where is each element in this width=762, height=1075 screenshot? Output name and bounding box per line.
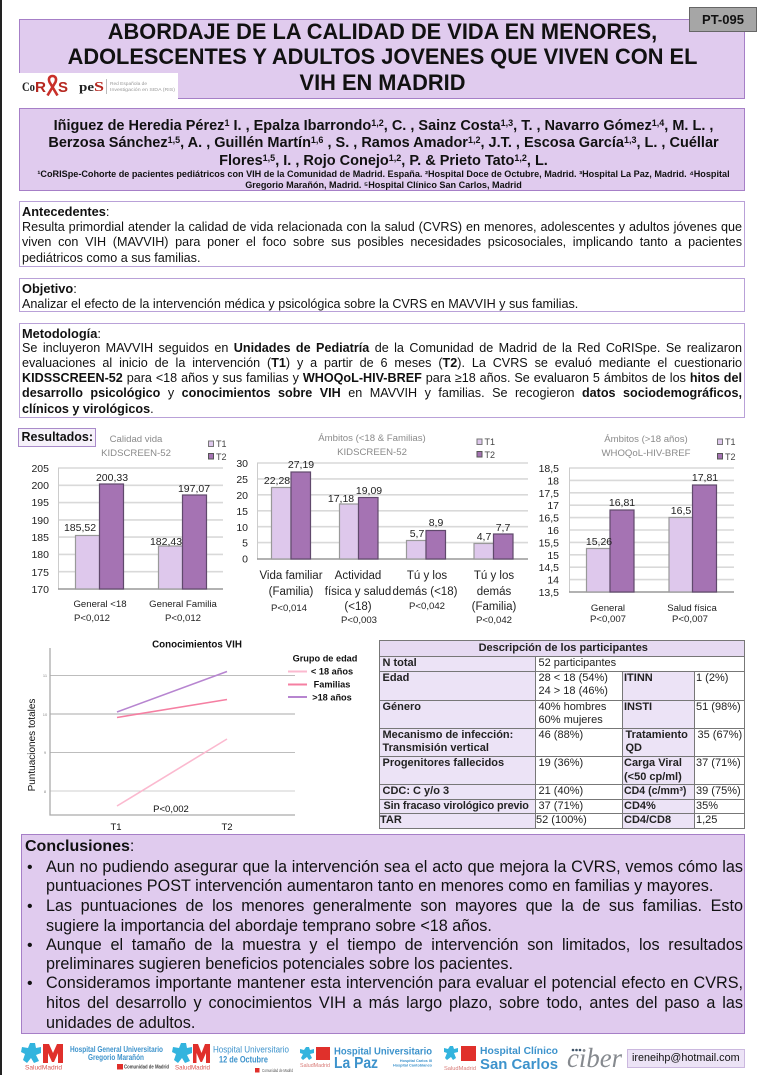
text: conclusiones bullets: sugiere la importancia del abordaje temprano sobre <18 años. [46, 917, 492, 935]
logo: ciber: ciber [567, 1043, 622, 1073]
chart: conocimientos VIH: 10 [43, 712, 48, 717]
table: descripcion de los participantes: 35 (67%) [698, 729, 742, 741]
logo: Hospital 12 de Octubre: SaludMadrid [175, 1064, 210, 1072]
text: conclusiones bullets: Las puntuaciones de los menores generalmente son mayores que la de sus familias. Esto [46, 897, 743, 915]
text: conclusiones bullets: • [27, 898, 33, 915]
table: descripcion de los participantes: 28 < 18 (54%) [538, 672, 608, 684]
chart: calidad de vida KIDSCREEN-52: 197,07 [178, 483, 210, 495]
logo: Hospital La Paz: Hospital Carlos III [400, 1059, 432, 1063]
chart: conocimientos VIH: Conocimientos VIH [152, 640, 242, 650]
chart: ambitos mayores de 18 WHOQoL: T1 [725, 437, 736, 447]
panel: authors [19, 108, 745, 191]
table: descripcion de los participantes: (<50 cp/ml) [624, 771, 682, 783]
chart: ambitos mayores de 18 WHOQoL: 14,5 [539, 562, 559, 574]
logo: CoRISpeS: pe [79, 79, 94, 94]
text: conclusiones bullets: Aunque el tamaño de la muestra y el tiempo de intervención son limitados, los resultados [46, 936, 743, 954]
logo: Hospital Gregorio Marañón: Gregorio Marañón [88, 1052, 144, 1062]
chart: ambitos menores de 18 y familias: demás (<18) [393, 586, 458, 598]
text: authors and affiliations: Flores1,5, I. , Rojo Conejo1,2, P. & Prieto Tato1,2, L. [219, 153, 548, 169]
logo: Hospital La Paz [300, 1046, 433, 1072]
chart: ambitos mayores de 18 WHOQoL: P<0,007 [672, 614, 708, 625]
logo: Hospital Gregorio Marañón: Hospital General Universitario [70, 1044, 163, 1054]
chart: ambitos menores de 18 y familias: 15 [236, 506, 248, 518]
chart: ambitos mayores de 18 WHOQoL [539, 434, 736, 625]
table: descripcion de los participantes: CD4/CD8 [624, 814, 671, 826]
heading: conclusiones: Conclusiones: [25, 838, 134, 855]
chart: conocimientos VIH: T2 [221, 822, 233, 833]
text: conclusiones bullets: unidades de adultos. [46, 1014, 195, 1032]
text: authors and affiliations: Gregorio Marañón, Madrid. ⁵Hospital Clínico San Carlos, Madrid [245, 180, 522, 190]
text: metodologia [22, 326, 742, 416]
table: descripcion de los participantes: 52 participantes [538, 657, 616, 669]
text: authors and affiliations: ¹CoRISpe-Cohorte de pacientes pediátricos con VIH de la Comunidad de Madrid. España. ²Hospital Doce de Octubre, Madrid. ³Hospital La Paz, Madrid. ⁴Hospital [37, 169, 730, 179]
table: descripcion de los participantes: Descripción de los participantes [479, 642, 648, 654]
chart: ambitos menores de 18 y familias: 20 [236, 490, 248, 502]
chart: calidad de vida KIDSCREEN-52: Calidad vida [110, 434, 163, 445]
chart: ambitos menores de 18 y familias: Ámbitos (<18 & Familias) [318, 433, 426, 444]
table: descripcion de los participantes: 1 (2%) [696, 672, 728, 684]
chart: ambitos menores de 18 y familias: Tú y los [407, 570, 447, 582]
logo: Hospital 12 de Octubre: Hospital Universitario [213, 1044, 289, 1054]
logo: Hospital 12 de Octubre: 12 de Octubre [219, 1054, 268, 1064]
chart: ambitos menores de 18 y familias: T2 [484, 450, 495, 460]
logo: Hospital 12 de Octubre [172, 1043, 293, 1073]
panel: title [19, 19, 745, 99]
logo: Hospital Clinico San Carlos [444, 1046, 558, 1073]
chart: calidad de vida KIDSCREEN-52 [31, 434, 227, 624]
text: metodologia: Metodología: [22, 326, 101, 340]
text: antecedentes: viven con VIH (MAVVIH) para poner el foco sobre sus posibles necesidades psicosociales, implicando tanto a pacientes [22, 234, 742, 248]
chart: conocimientos VIH: 9 [44, 750, 47, 755]
table: descripcion de los participantes: 37 (71%) [538, 800, 583, 812]
logo: CoRISpeS: Investigación en SIDA (RIS) [110, 87, 176, 92]
chart: ambitos menores de 18 y familias: 22,28 [264, 475, 290, 487]
text: antecedentes: Antecedentes: [22, 204, 109, 218]
text: metodologia: Se incluyeron MAVVIH seguidos en Unidades de Pediatría de la Comunidad de Madrid de la Red CoRISpe. Se realizaron [22, 340, 742, 354]
chart: calidad de vida KIDSCREEN-52: 182,43 [150, 536, 182, 548]
table: descripcion de los participantes: 37 (71%) [696, 757, 741, 769]
chart: ambitos mayores de 18 WHOQoL: 18,5 [539, 463, 559, 475]
contact email: ireneihp@hotmail.com [632, 1052, 740, 1064]
chart: ambitos menores de 18 y familias: (Familia) [472, 601, 517, 613]
chart: conocimientos VIH: Grupo de edad [293, 654, 357, 664]
logo: Hospital La Paz: Hospital Cantoblanco [393, 1064, 433, 1068]
chart: ambitos mayores de 18 WHOQoL: 17,81 [692, 472, 718, 484]
heading: title line 2: ADOLESCENTES Y ADULTOS JOVENES QUE VIVEN CON EL [68, 44, 697, 69]
chart: calidad de vida KIDSCREEN-52: 200 [31, 480, 49, 492]
chart: ambitos mayores de 18 WHOQoL: T2 [725, 452, 736, 462]
chart: ambitos mayores de 18 WHOQoL: 16,5 [671, 505, 691, 517]
table: descripcion de los participantes: TAR [380, 814, 402, 826]
logo: Hospital La Paz: SaludMadrid [300, 1063, 330, 1069]
text: antecedentes: pediátricos como a sus familias. [22, 250, 200, 264]
text: conclusiones bullets: puntuaciones POST intervención aumentaron tanto en menores como en familias y mayores. [46, 877, 713, 895]
chart: calidad de vida KIDSCREEN-52: 205 [31, 463, 49, 475]
contact email [627, 1049, 745, 1068]
chart: ambitos mayores de 18 WHOQoL: 15,5 [539, 538, 559, 550]
chart: calidad de vida KIDSCREEN-52: General <18 [73, 599, 127, 610]
chart: calidad de vida KIDSCREEN-52: 195 [31, 497, 49, 509]
chart: conocimientos VIH: Puntuaciones totales [27, 699, 38, 791]
text: conclusiones bullets: • [27, 859, 33, 876]
table: descripcion de los participantes: CD4 (c/mm³) [624, 785, 686, 797]
text: conclusiones bullets: preliminares sugieren beneficios potenciales sobre los pacientes. [46, 955, 513, 973]
chart: ambitos menores de 18 y familias: T1 [484, 437, 495, 447]
table: descripcion de los participantes: 40% hombres [538, 701, 606, 713]
chart: ambitos menores de 18 y familias: KIDSCREEN-52 [337, 447, 407, 458]
chart: conocimientos VIH: 8 [44, 789, 47, 794]
panel: objetivo [19, 278, 745, 312]
chart: ambitos menores de 18 y familias: Actividad [335, 570, 381, 582]
chart: ambitos menores de 18 y familias: 19,09 [356, 485, 382, 497]
table: descripcion de los participantes: QD [626, 742, 642, 754]
table: descripcion de los participantes: Transmisión vertical [382, 742, 489, 754]
logo: CoRISpeS: Co [22, 79, 35, 94]
table: descripcion de los participantes: ITINN [624, 672, 653, 684]
logo: Hospital Gregorio Marañón: SaludMadrid [25, 1064, 62, 1072]
chart: ambitos menores de 18 y familias: P<0,014 [271, 603, 308, 614]
chart: ambitos menores de 18 y familias: 4,7 [477, 531, 491, 543]
chart: ambitos menores de 18 y familias: P<0,042 [476, 615, 512, 626]
chart: calidad de vida KIDSCREEN-52: 185 [31, 532, 49, 544]
chart: calidad de vida KIDSCREEN-52: 180 [31, 549, 49, 561]
chart: ambitos mayores de 18 WHOQoL: 14 [547, 574, 559, 586]
text: objetivo: Analizar el efecto de la intervención médica y psicológica sobre la CVRS en MAVVIH y sus familias. [22, 296, 578, 310]
chart: ambitos menores de 18 y familias: 25 [236, 474, 248, 486]
table: descripcion de los participantes: Progenitores fallecidos [382, 757, 504, 769]
chart: ambitos mayores de 18 WHOQoL: 16 [547, 525, 559, 537]
heading: resultados [18, 428, 96, 447]
text: objetivo: Objetivo: [22, 280, 77, 296]
chart: ambitos menores de 18 y familias: 5 [242, 538, 248, 550]
table: descripcion de los participantes: Sin fracaso virológico previo [384, 800, 529, 812]
chart: conocimientos VIH: < 18 años [311, 666, 353, 676]
badge: poster code: PT-095 [702, 12, 744, 27]
text: conclusiones bullets: Consideramos importante mantener esta intervención para evaluar el potencial efecto en CVRS, [46, 974, 743, 992]
table: descripcion de los participantes: 35% [696, 800, 718, 812]
table: descripcion de los participantes: 19 (36%) [538, 757, 583, 769]
text: conclusiones bullets: hitos del desarrollo y conocimientos VIH a más largo plazo, sobre todo, antes del paso a las [46, 994, 743, 1012]
chart: ambitos mayores de 18 WHOQoL: Ámbitos (>18 años) [604, 434, 688, 445]
heading: title line 3: VIH EN MADRID [300, 70, 465, 95]
text: authors and affiliations: Iñiguez de Heredia Pérez1 I. , Epalza Ibarrondo1,2, C. , Sainz Costa1,3, T. , Navarro Gómez1,4, M. L. , [54, 118, 713, 134]
chart: ambitos menores de 18 y familias: 0 [242, 554, 248, 566]
panel: antecedentes [19, 201, 745, 267]
table: descripcion de los participantes: Género [382, 701, 421, 713]
chart: ambitos menores de 18 y familias: (Familia) [269, 586, 314, 598]
chart: calidad de vida KIDSCREEN-52: P<0,012 [74, 613, 110, 624]
chart: ambitos mayores de 18 WHOQoL: 17 [547, 500, 559, 512]
panel: conclusiones [21, 834, 745, 1034]
chart: ambitos mayores de 18 WHOQoL: General [591, 603, 625, 614]
text: metodologia: evaluaciones al inicio de la intervención (T1) y a partir de 6 meses (T2). La CVRS se evaluó mediante el cuestionario [22, 356, 742, 370]
table: descripcion de los participantes: 24 > 18 (46%) [538, 685, 608, 697]
table: descripcion de los participantes: 1,25 [696, 814, 717, 826]
logo: Hospital La Paz: Hospital Universitario [334, 1046, 432, 1058]
chart: ambitos mayores de 18 WHOQoL: 16,81 [609, 497, 635, 509]
text: metodologia: desarrollo psicológico y conocimientos sobre VIH en MAVVIH y familias. Se recogieron datos sociodemográficos, [22, 386, 742, 400]
badge: poster code [689, 7, 757, 32]
chart: conocimientos VIH: 11 [43, 673, 48, 678]
chart: ambitos menores de 18 y familias: 7,7 [496, 522, 510, 534]
chart: conocimientos VIH: P<0,002 [153, 804, 189, 815]
table: descripcion de los participantes: Carga Viral [624, 757, 682, 769]
chart: ambitos menores de 18 y familias: 5,7 [410, 528, 424, 540]
table: descripcion de los participantes: 52 (100%) [536, 814, 587, 826]
text: authors and affiliations: Berzosa Sánchez1,5, A. , Guillén Martín1,6 , S. , Ramos Amador1,2, J.T. , Escosa García1,3, L. , Cuéllar [48, 135, 719, 151]
chart: ambitos menores de 18 y familias: Vida familiar [259, 570, 323, 582]
logo: CoRISpeS [19, 73, 178, 99]
table: descripcion de los participantes: 21 (40%) [538, 785, 583, 797]
chart: calidad de vida KIDSCREEN-52: KIDSCREEN-52 [101, 448, 171, 459]
chart: conocimientos VIH: T1 [110, 822, 122, 833]
chart: ambitos menores de 18 y familias: 10 [236, 522, 248, 534]
chart: ambitos mayores de 18 WHOQoL: 13,5 [539, 587, 559, 599]
table: descripcion de los participantes: 46 (88%) [538, 729, 583, 741]
chart: ambitos mayores de 18 WHOQoL: Salud física [667, 603, 717, 614]
logo: CoRISpeS: S [94, 80, 104, 95]
text: authors and affiliations [37, 118, 730, 190]
chart: ambitos menores de 18 y familias: P<0,042 [409, 601, 445, 612]
chart: calidad de vida KIDSCREEN-52: 170 [31, 584, 49, 596]
table: descripcion de los participantes: Tratamiento [626, 729, 688, 741]
table: descripcion de los participantes: CDC: C y/o 3 [382, 785, 449, 797]
table: descripcion de los participantes: Mecanismo de infección: [382, 729, 513, 741]
chart: ambitos mayores de 18 WHOQoL: 17,5 [539, 488, 559, 500]
table: descripcion de los participantes: 60% mujeres [538, 714, 603, 726]
text: metodologia: KIDSSCREEN-52 para <18 años y sus familias y WHOQoL-HIV-BREF para ≥18 años. Se evaluaron 5 ámbitos de los hitos del [22, 370, 742, 384]
text: metodologia: clínicos y virológicos. [22, 402, 154, 416]
chart: ambitos menores de 18 y familias: P<0,003 [341, 615, 377, 626]
chart: ambitos mayores de 18 WHOQoL: WHOQoL-HIV-BREF [601, 448, 691, 459]
logo: CoRISpeS: Red Española de [110, 81, 147, 86]
chart: ambitos menores de 18 y familias: 27,19 [288, 459, 314, 471]
logo: Hospital 12 de Octubre: Comunidad de Madrid [262, 1068, 293, 1073]
text: conclusiones bullets: • [27, 937, 33, 954]
chart: ambitos mayores de 18 WHOQoL: 18 [547, 476, 559, 488]
logo: Hospital Clinico San Carlos: San Carlos [480, 1056, 558, 1073]
chart: ambitos mayores de 18 WHOQoL: 15,26 [586, 536, 612, 548]
table: descripcion de los participantes: Edad [382, 672, 409, 684]
logo: Hospital Gregorio Marañón [21, 1043, 169, 1072]
table: descripcion de los participantes: 39 (75%) [696, 785, 741, 797]
chart: calidad de vida KIDSCREEN-52: General Familia [149, 599, 218, 610]
table: descripcion de los participantes [379, 640, 745, 829]
chart: calidad de vida KIDSCREEN-52: T1 [216, 439, 227, 449]
heading: title line 1: ABORDAJE DE LA CALIDAD DE VIDA EN MENORES, [108, 19, 657, 44]
table: descripcion de los participantes: N total [382, 657, 417, 669]
chart: ambitos mayores de 18 WHOQoL: 15 [547, 550, 559, 562]
chart: ambitos menores de 18 y familias: (<18) [344, 601, 372, 613]
text: conclusiones bullets: • [27, 975, 33, 992]
chart: calidad de vida KIDSCREEN-52: T2 [216, 452, 227, 462]
logo: Hospital La Paz: La Paz [334, 1055, 378, 1072]
logo: Hospital Clinico San Carlos: Hospital Clínico [480, 1046, 558, 1057]
chart: conocimientos VIH: >18 años [312, 692, 352, 702]
text: antecedentes [22, 204, 742, 264]
chart: calidad de vida KIDSCREEN-52: 190 [31, 515, 49, 527]
chart: ambitos menores de 18 y familias: física y salud [325, 586, 391, 598]
chart: conocimientos VIH [27, 640, 357, 833]
chart: calidad de vida KIDSCREEN-52: 185,52 [64, 522, 96, 534]
chart: ambitos menores de 18 y familias: demás [477, 586, 512, 598]
logo: Hospital Clinico San Carlos: SaludMadrid [444, 1066, 476, 1072]
table: descripcion de los participantes: CD4% [624, 800, 656, 812]
chart: ambitos menores de 18 y familias: 17,18 [328, 493, 354, 505]
table: descripcion de los participantes: INSTI [624, 701, 652, 713]
chart: ambitos menores de 18 y familias: 8,9 [429, 517, 443, 529]
panel: metodologia [19, 323, 745, 418]
chart: calidad de vida KIDSCREEN-52: 175 [31, 567, 49, 579]
chart: ambitos menores de 18 y familias [236, 433, 528, 626]
text: antecedentes: Resulta primordial atender la calidad de vida relacionada con la salud (CVRS) en menores, adolescentes y adultos jóvenes que [22, 220, 742, 234]
chart: calidad de vida KIDSCREEN-52: P<0,012 [165, 613, 201, 624]
chart: ambitos menores de 18 y familias: 30 [236, 458, 248, 470]
chart: conocimientos VIH: Familias [314, 680, 350, 690]
text: objetivo [22, 280, 578, 310]
logo: CoRISpeS: S [58, 79, 68, 96]
chart: ambitos menores de 18 y familias: Tú y los [474, 570, 514, 582]
chart: ambitos mayores de 18 WHOQoL: P<0,007 [590, 614, 626, 625]
chart: calidad de vida KIDSCREEN-52: 200,33 [96, 472, 128, 484]
logo: CoRISpeS: R [35, 79, 46, 96]
text: conclusiones bullets: Aun no pudiendo asegurar que la intervención sea el acto que mejora la CVRS, vemos cómo las [46, 858, 743, 876]
heading: resultados: Resultados: [22, 430, 93, 444]
table: descripcion de los participantes: 51 (98%) [696, 701, 741, 713]
logo: Hospital Gregorio Marañón: Comunidad de Madrid [124, 1064, 169, 1070]
chart: ambitos mayores de 18 WHOQoL: 16,5 [539, 512, 559, 524]
